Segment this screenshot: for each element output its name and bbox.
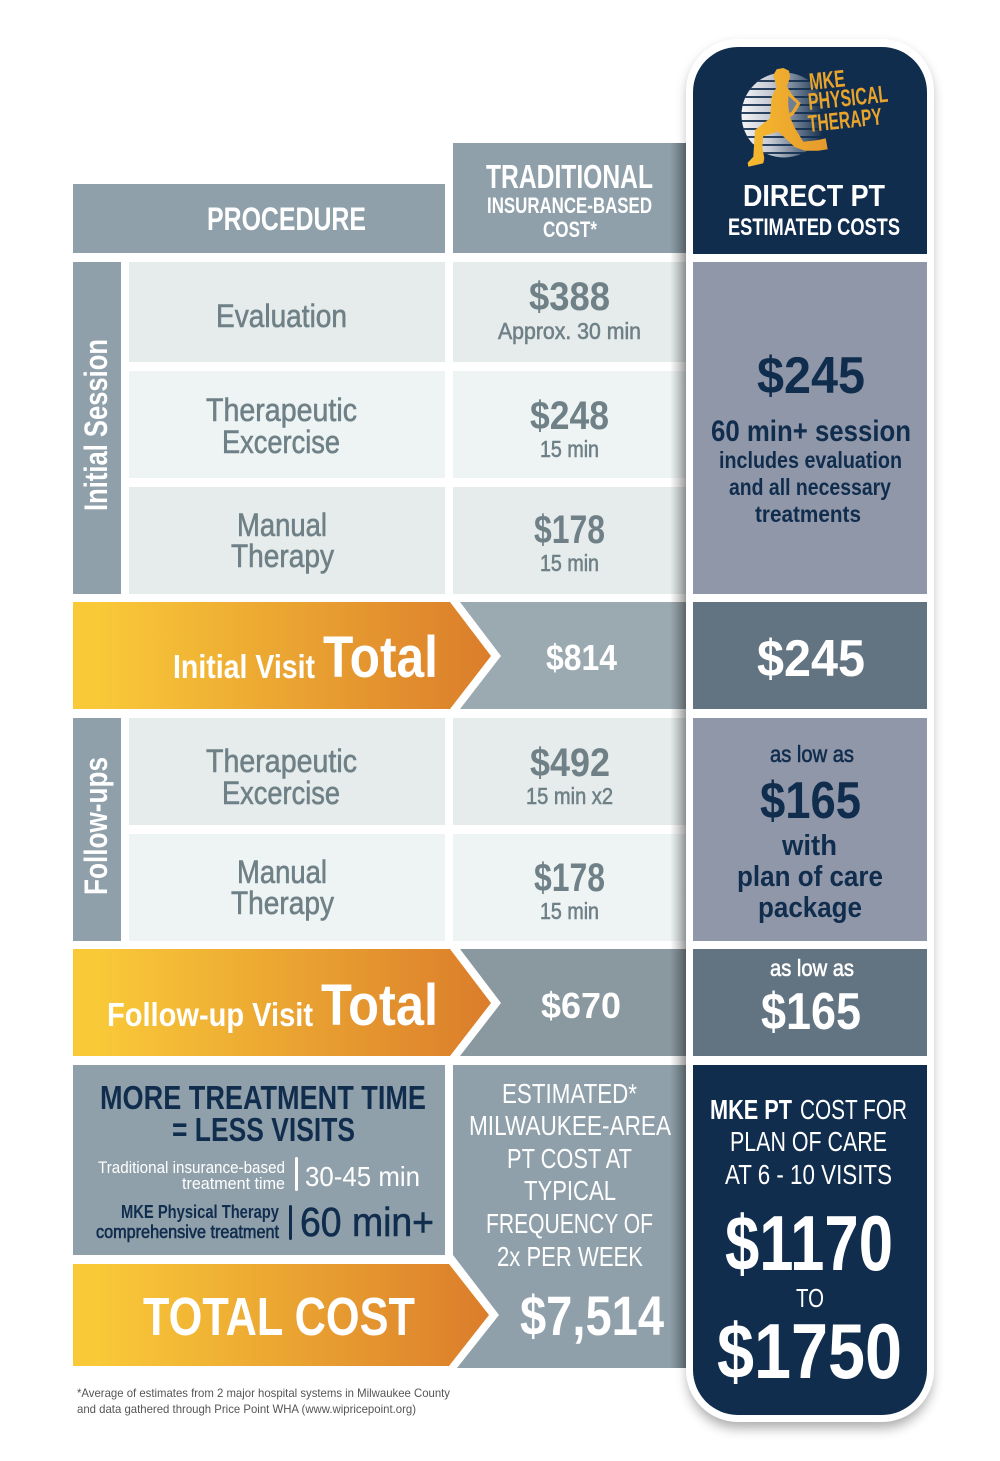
- panel: more treatment time: MKE Physical Therapy: [121, 1202, 279, 1222]
- cell: follow-up manual price: 15 min: [540, 898, 599, 924]
- footnote: *Average of estimates from 2 major hospital systems in Milwaukee County: [77, 1386, 450, 1400]
- panel: estimated milwaukee-area cost: ESTIMATED*: [502, 1078, 637, 1109]
- cell: direct follow-ups: plan of care: [737, 861, 883, 893]
- panel: estimated milwaukee-area cost: PT COST AT: [507, 1143, 632, 1174]
- cell: evaluation price: Approx. 30 min: [498, 318, 641, 344]
- cell: direct follow-up total: as low as: [770, 955, 854, 981]
- panel: estimated milwaukee-area cost: MILWAUKEE-AREA: [469, 1110, 671, 1141]
- panel: more treatment time: treatment time: [182, 1174, 285, 1193]
- header: traditional insurance-based cost: COST*: [543, 217, 597, 242]
- cell: evaluation price: $388: [529, 275, 610, 319]
- panel: more treatment time: comprehensive treatment: [96, 1222, 279, 1242]
- row: therapeutic excercise: Excercise: [222, 424, 340, 460]
- row: evaluation: Evaluation: [216, 298, 347, 334]
- panel: estimated milwaukee-area cost: 2x PER WEEK: [497, 1241, 643, 1272]
- panel: estimated milwaukee-area cost: TYPICAL: [524, 1175, 616, 1206]
- cell: direct plan of care cost: AT 6 - 10 VISITS: [725, 1159, 892, 1190]
- total arrow: follow-up visit: Follow-up Visit: [107, 996, 313, 1033]
- panel: more treatment time: = LESS VISITS: [172, 1111, 355, 1148]
- row: therapeutic excercise: Therapeutic: [206, 392, 357, 428]
- row: therapeutic excercise: [129, 371, 445, 478]
- row: follow-up therapeutic excercise: Therapeutic: [206, 743, 357, 779]
- row: follow-up therapeutic excercise: [129, 718, 445, 825]
- cell: direct initial total: [693, 602, 927, 709]
- total arrow: follow-up visit: [73, 949, 491, 1056]
- panel: more treatment time: [73, 1065, 445, 1255]
- cell: direct initial session: and all necessary: [729, 474, 891, 500]
- row: follow-up manual therapy: [129, 834, 445, 941]
- cell: evaluation price: [453, 262, 686, 362]
- footnote: [77, 1386, 450, 1416]
- cell: follow-up manual price: [453, 834, 686, 941]
- cell: direct follow-ups: with: [781, 830, 837, 862]
- total arrow: initial visit: Initial Visit: [173, 648, 315, 685]
- sidebar: initial session: [73, 262, 121, 594]
- icon: mke physical therapy logo: [735, 65, 889, 167]
- cell: direct plan of care cost: $1170: [725, 1199, 893, 1287]
- cell: direct follow-ups: package: [758, 892, 862, 924]
- footnote: and data gathered through Price Point WHA (www.wipricepoint.org): [77, 1402, 416, 1416]
- row: follow-up therapeutic excercise: Excercise: [222, 775, 340, 811]
- header: traditional insurance-based cost: TRADITIONAL: [486, 158, 653, 195]
- icon: mke physical therapy logo: THERAPY: [807, 103, 883, 138]
- panel: more treatment time: MORE TREATMENT TIME: [100, 1079, 426, 1116]
- header: direct pt: ESTIMATED COSTS: [728, 214, 900, 241]
- cell: direct initial session: [693, 262, 927, 594]
- total arrow: total cost: [73, 1264, 489, 1366]
- cell: manual price: [453, 487, 686, 594]
- cell: follow-up visit traditional total: [460, 949, 686, 1056]
- sidebar: follow-ups: Follow-ups: [78, 757, 114, 895]
- panel: estimated milwaukee-area cost: $7,514: [520, 1284, 664, 1347]
- icon: mke physical therapy logo: PHYSICAL: [807, 81, 889, 116]
- cell: direct follow-ups: as low as: [770, 741, 854, 767]
- icon: mke physical therapy logo: MKE: [808, 65, 846, 96]
- header: procedure: PROCEDURE: [207, 201, 366, 237]
- cell: direct initial total: $245: [757, 630, 865, 688]
- total arrow: initial visit: Total: [323, 625, 438, 690]
- cell: direct plan of care cost: PLAN OF CARE: [730, 1126, 887, 1157]
- panel: estimated milwaukee-area cost: FREQUENCY OF: [486, 1208, 653, 1239]
- header: traditional insurance-based cost: INSURANCE-BASED: [487, 193, 652, 218]
- row: manual therapy: [129, 487, 445, 594]
- cell: follow-up visit traditional total: $670: [541, 985, 621, 1026]
- cell: direct follow-ups: $165: [760, 772, 861, 830]
- cell: direct initial session: includes evaluation: [719, 447, 902, 473]
- panel: more treatment time: 60 min+: [300, 1199, 434, 1245]
- row: follow-up manual therapy: Manual: [237, 854, 327, 890]
- cell: follow-up manual price: $178: [534, 856, 605, 900]
- cell: direct plan of care cost: TO: [796, 1283, 824, 1313]
- cell: direct initial session: $245: [757, 347, 865, 405]
- total arrow: follow-up visit: Total: [321, 973, 438, 1038]
- cell: direct plan of care cost: COST FOR: [800, 1094, 907, 1125]
- cell: follow-up therapeutic price: 15 min x2: [526, 783, 613, 809]
- cell: therapeutic price: 15 min: [540, 436, 599, 462]
- cell: direct plan of care cost: MKE PT: [710, 1094, 792, 1125]
- total arrow: total cost: TOTAL COST: [143, 1287, 415, 1347]
- panel: estimated milwaukee-area cost: [453, 1065, 686, 1368]
- cell: direct initial session: treatments: [755, 501, 861, 527]
- cell: direct initial session: 60 min+ session: [711, 415, 911, 448]
- header: procedure: [73, 184, 445, 253]
- cell: therapeutic price: [453, 371, 686, 478]
- cell: follow-up therapeutic price: $492: [530, 741, 610, 785]
- cell: direct follow-ups: [693, 718, 927, 941]
- row: manual therapy: Therapy: [231, 538, 334, 574]
- cell: follow-up therapeutic price: [453, 718, 686, 825]
- header: direct pt: [693, 47, 927, 254]
- header: traditional insurance-based cost: [453, 143, 686, 253]
- total arrow: initial visit: [73, 602, 491, 709]
- cell: manual price: 15 min: [540, 550, 599, 576]
- cell: initial visit traditional total: [460, 602, 686, 709]
- cell: manual price: $178: [534, 508, 605, 552]
- row: follow-up manual therapy: Therapy: [231, 885, 334, 921]
- panel: more treatment time: Traditional insurance-based: [98, 1158, 285, 1177]
- row: evaluation: [129, 262, 445, 362]
- row: manual therapy: Manual: [237, 507, 327, 543]
- sidebar: initial session: Initial Session: [78, 339, 114, 511]
- cell: direct follow-up total: $165: [761, 983, 861, 1041]
- panel: direct pt column: [686, 39, 934, 1422]
- cell: direct follow-up total: [693, 949, 927, 1056]
- cell: direct plan of care cost: [693, 1065, 927, 1415]
- cell: direct plan of care cost: $1750: [717, 1307, 902, 1395]
- sidebar: follow-ups: [73, 718, 121, 941]
- panel: more treatment time: 30-45 min: [305, 1161, 420, 1192]
- cell: therapeutic price: $248: [530, 394, 609, 438]
- header: direct pt: DIRECT PT: [743, 178, 885, 213]
- cell: initial visit traditional total: $814: [546, 637, 617, 678]
